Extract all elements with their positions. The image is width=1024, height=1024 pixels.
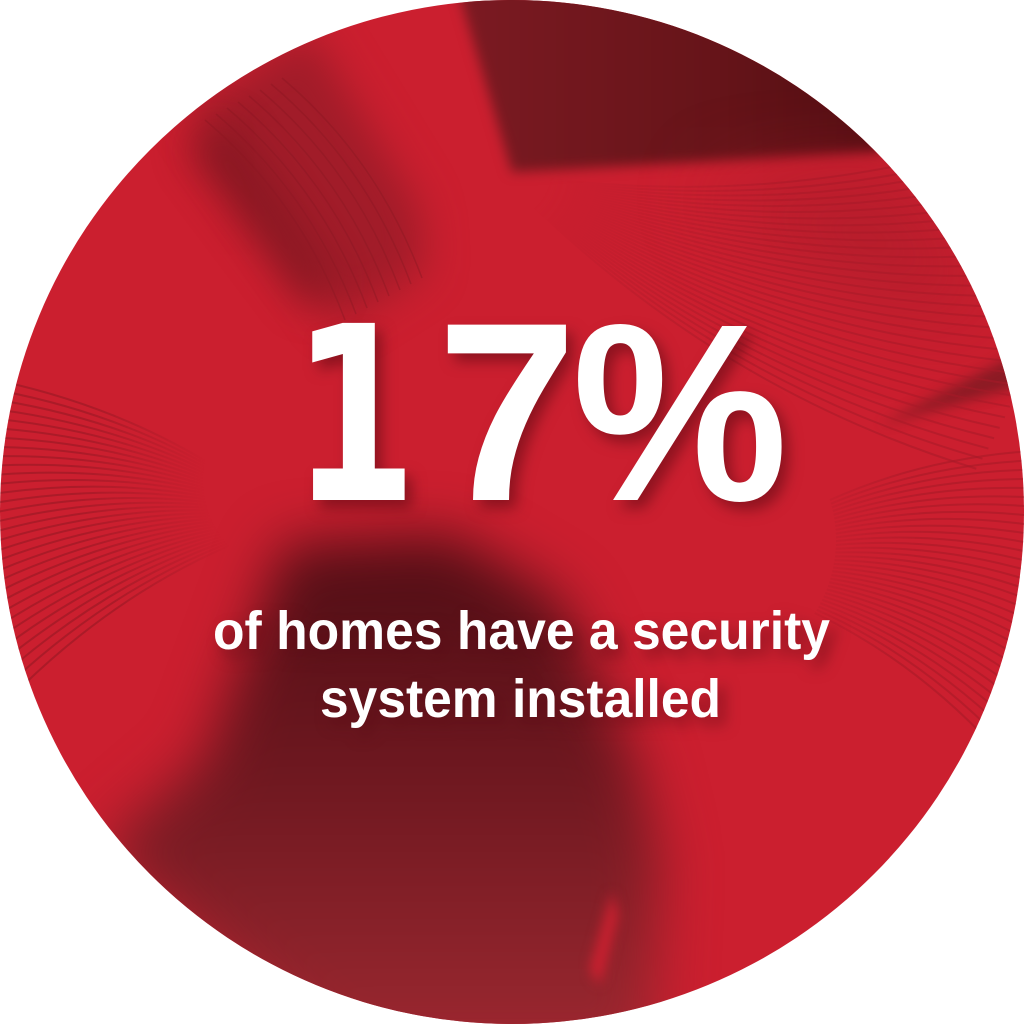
big number: 17%: % (572, 271, 788, 554)
line texture: right fan (824, 451, 1024, 730)
dark shape: right edge streak (888, 356, 1010, 426)
dark shape: upper right fan shade (700, 170, 1000, 330)
line texture: upper right fan (612, 166, 1011, 470)
line texture: upper left fan (205, 78, 422, 320)
big number: 17%: 1 (292, 275, 417, 558)
dark shape: lower centre (100, 535, 660, 1024)
dark shape: top right (455, 0, 930, 172)
dark shape: upper left fan (185, 30, 425, 325)
big number: 17% (312, 322, 796, 518)
line texture: left fan (0, 384, 198, 682)
big number: 17%: 7 (437, 270, 577, 555)
caption: of homes have a security system installed: of homes have a security (213, 601, 830, 661)
caption: of homes have a security system installed (213, 601, 830, 729)
caption: of homes have a security system installed: system installed (320, 669, 721, 729)
